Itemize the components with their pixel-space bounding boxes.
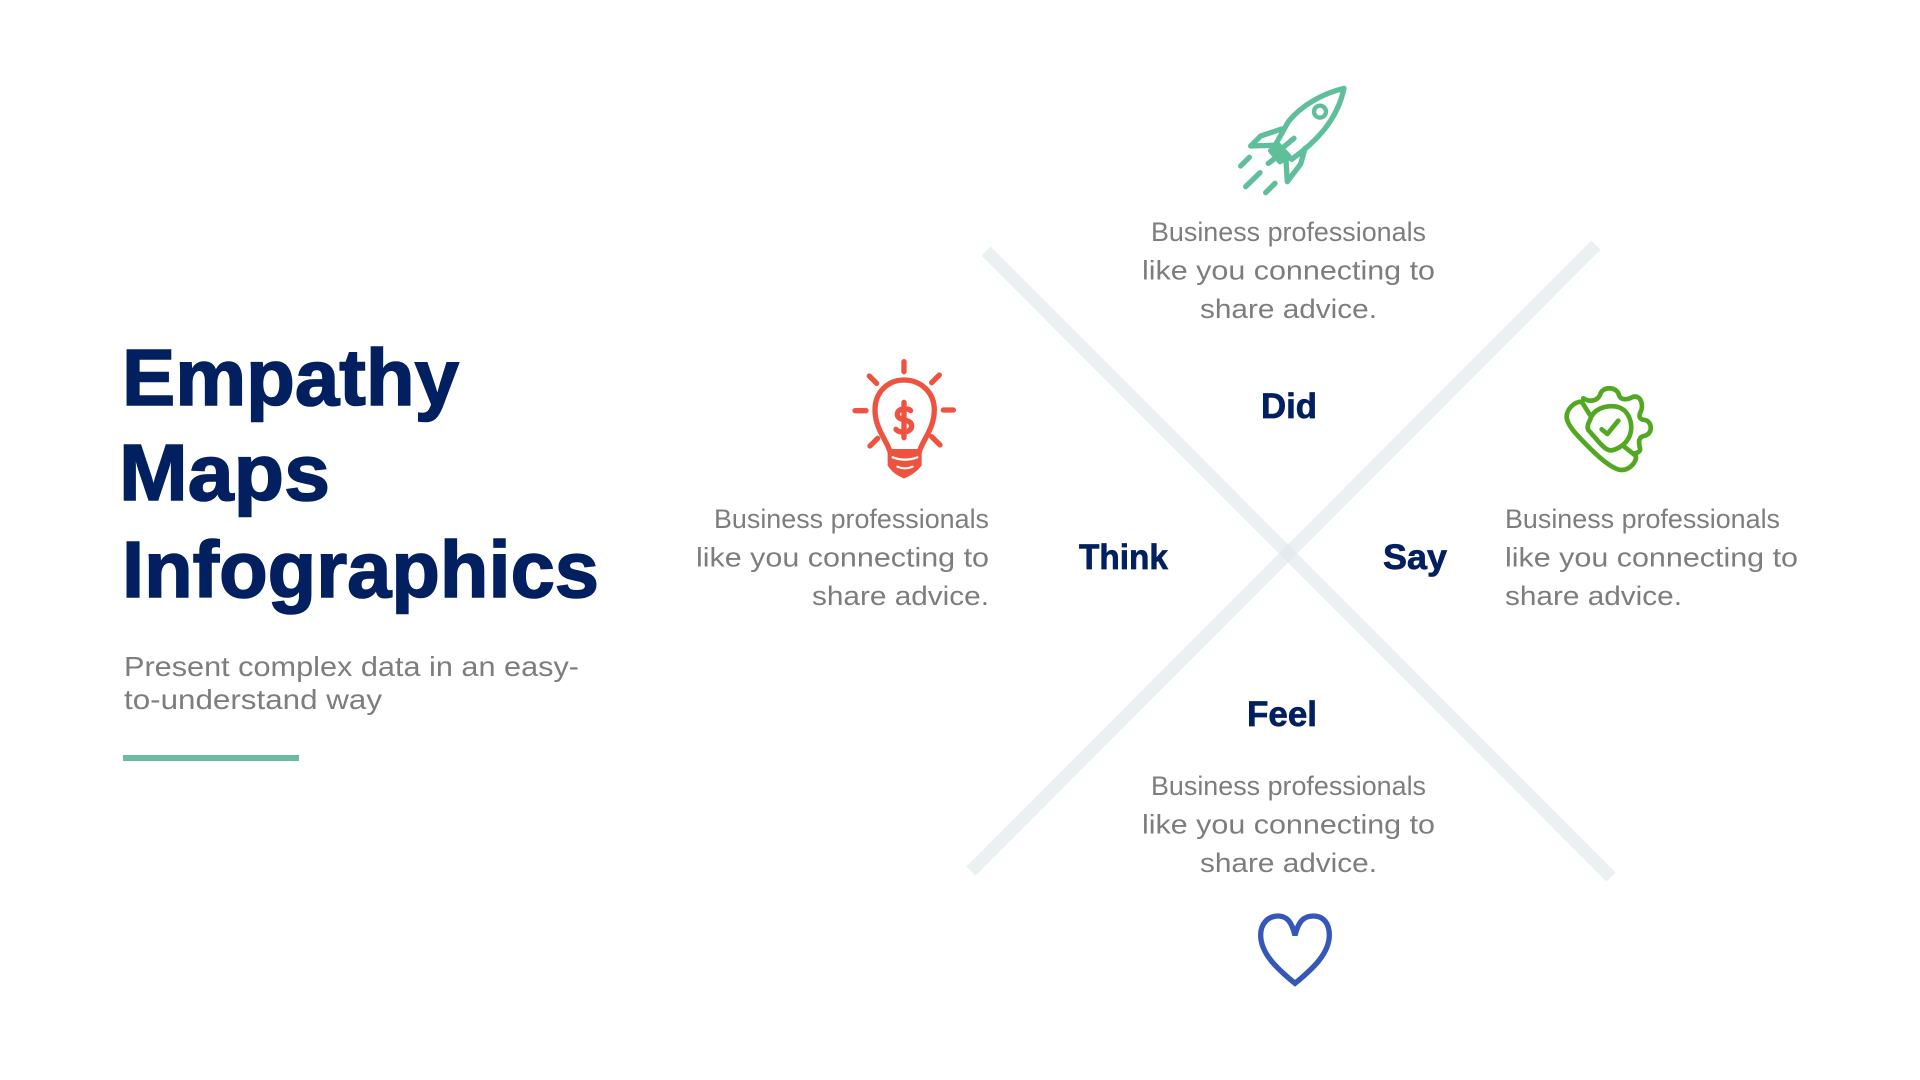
text: top block: share advice. — [1200, 294, 1377, 324]
icon: rocket — [1241, 88, 1344, 193]
text: top block — [1142, 217, 1435, 324]
text: left block: like you connecting to — [696, 542, 989, 572]
label: Did: Did — [1261, 387, 1317, 426]
text: bottom block: like you connecting to — [1142, 810, 1435, 840]
accent rule — [123, 755, 299, 761]
label: Say: Say — [1383, 538, 1448, 577]
label: Think: Think — [1079, 538, 1169, 577]
label: Feel: Feel — [1247, 695, 1317, 734]
title: Maps — [119, 428, 330, 517]
text: right block: Business professionals — [1505, 504, 1780, 534]
title — [119, 333, 599, 614]
text: right block — [1505, 504, 1798, 611]
text: left block — [696, 504, 989, 611]
text: bottom block: Business professionals — [1151, 771, 1426, 801]
text: bottom block — [1142, 771, 1435, 878]
text: top block: Business professionals — [1151, 217, 1426, 247]
title: Infographics — [122, 525, 599, 614]
icon: light bulb with dollar — [855, 362, 953, 477]
text: right block: like you connecting to — [1505, 542, 1798, 572]
text: left block: share advice. — [812, 581, 989, 611]
text: left block: Business professionals — [714, 504, 989, 534]
title: Empathy — [122, 333, 459, 422]
subtitle: Present complex data in an easy- — [124, 651, 579, 682]
text: top block: like you connecting to — [1142, 256, 1435, 286]
icon: phone gear check — [1567, 388, 1651, 470]
subtitle — [124, 651, 579, 715]
text: right block: share advice. — [1505, 581, 1682, 611]
icon: heart — [1261, 916, 1329, 983]
text: bottom block: share advice. — [1200, 848, 1377, 878]
X divider chart — [971, 245, 1611, 877]
subtitle: to-understand way — [124, 684, 382, 715]
